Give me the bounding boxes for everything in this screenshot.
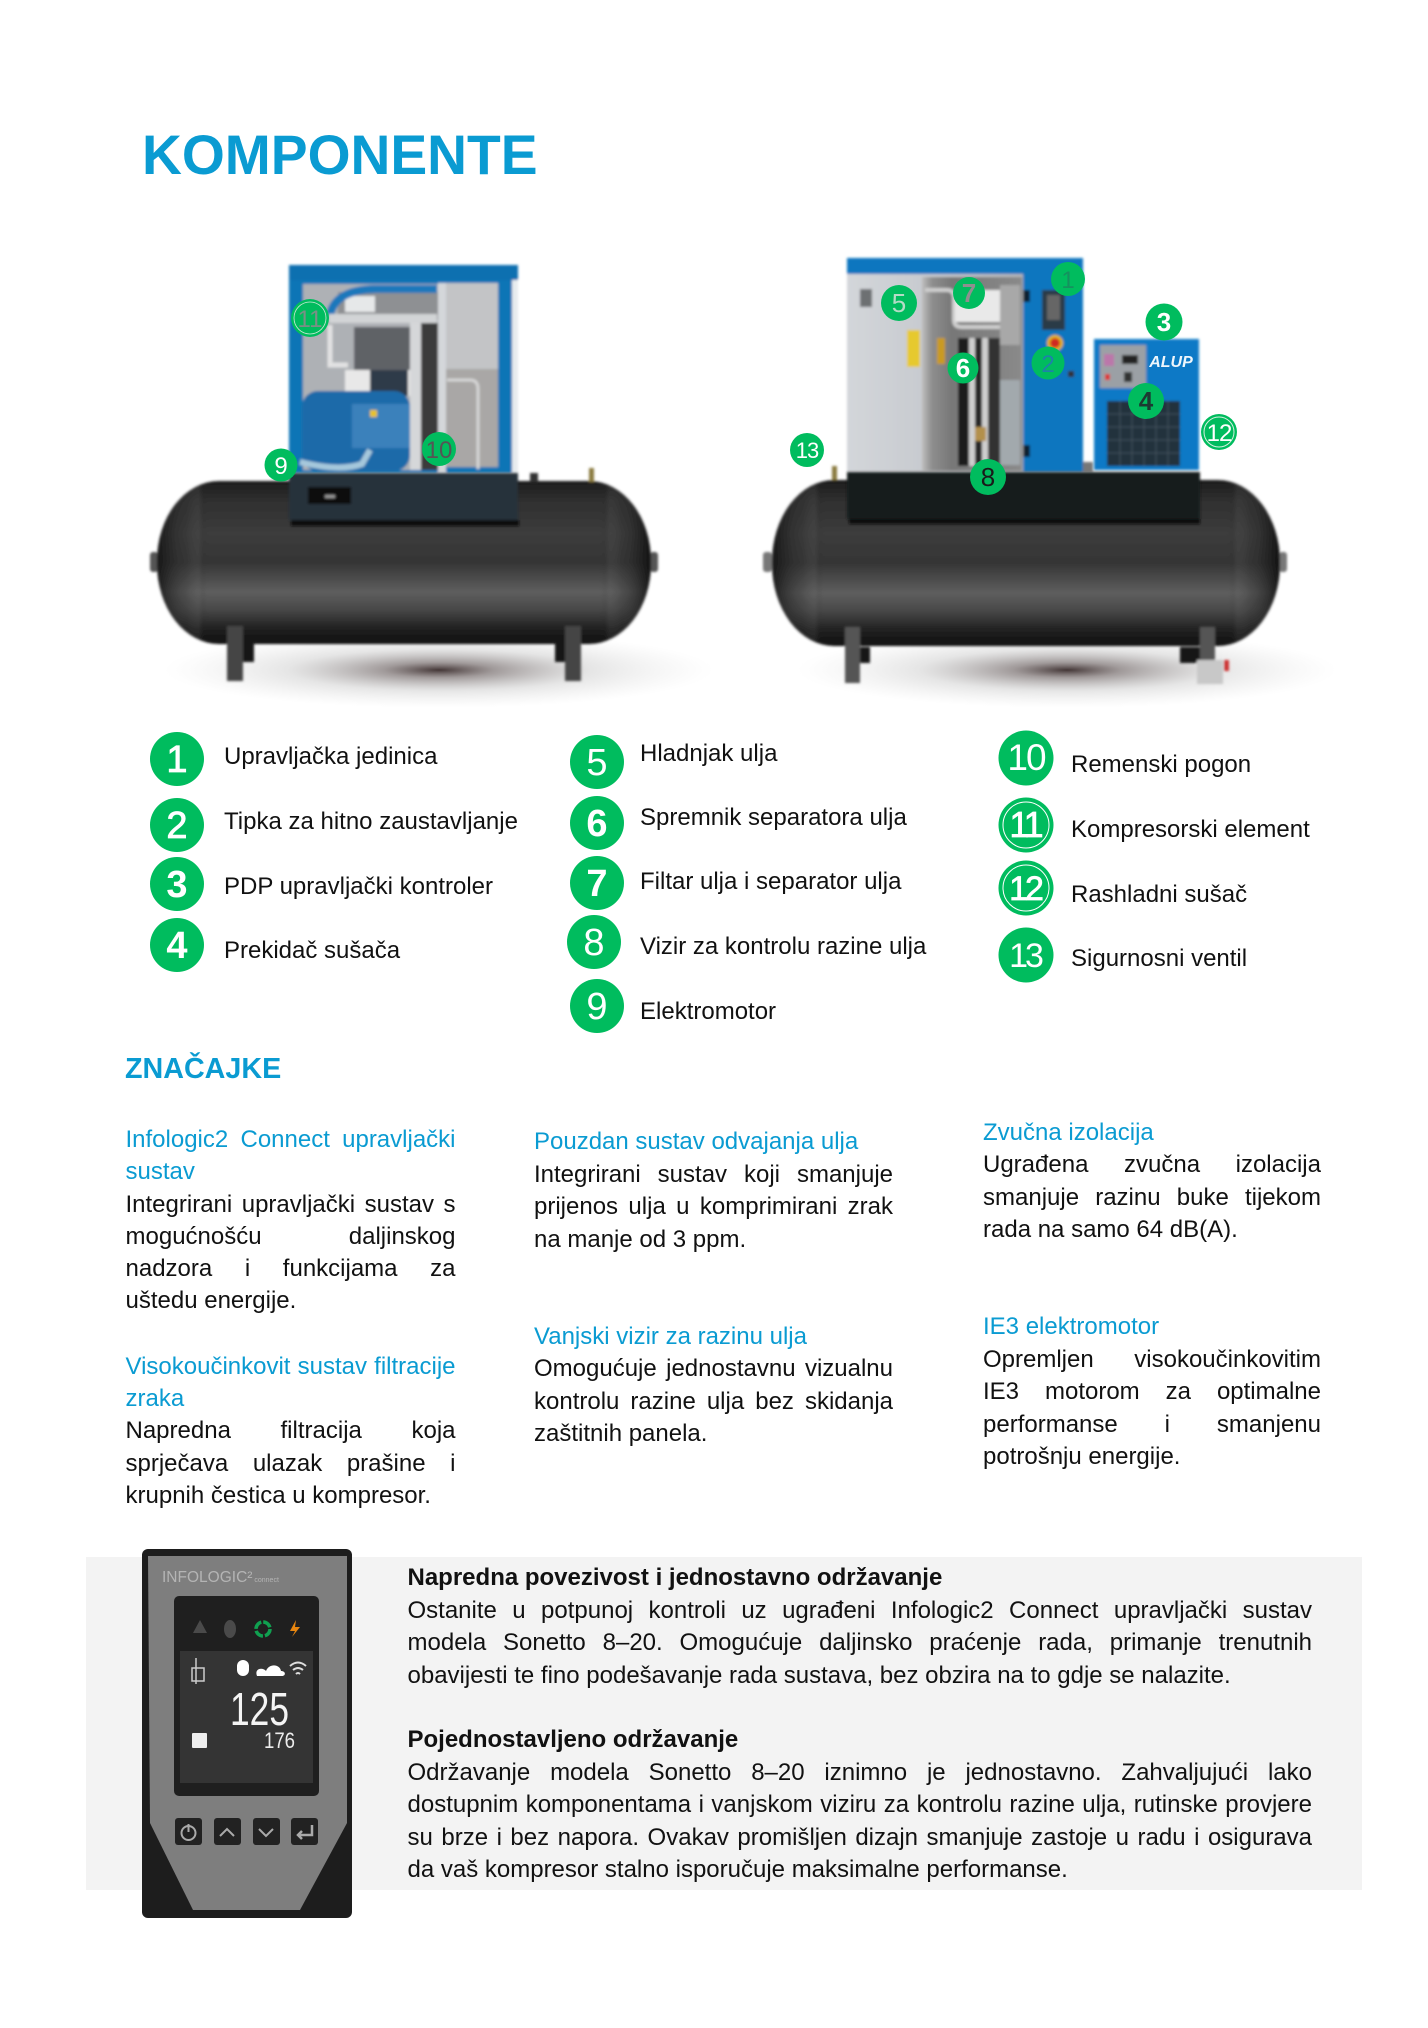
legend item 7: [570, 856, 902, 910]
icon: Infologic controller: [142, 1549, 352, 1918]
badge 11: 11: [298, 306, 322, 333]
badge 7: [953, 277, 985, 309]
text: sprječava ulazak prašine i: [126, 1450, 456, 1477]
legend item 12: Rashladni sušač: [1071, 881, 1247, 908]
floor shadow: [797, 632, 1337, 708]
badge 12: 12: [1207, 420, 1232, 447]
legend item 6: 6: [586, 803, 608, 845]
legend item 3: [150, 857, 493, 911]
cabinet base: [289, 473, 519, 526]
text block: maintenance: [408, 1726, 1312, 1883]
badge 13: 13: [796, 438, 819, 463]
badge 9: 9: [274, 453, 288, 480]
illustration: compressor left view: [148, 263, 662, 701]
text: su brze i bez napora. Ovakav promišljen dizajn smanjuje zastoje u radu i osigurava: [408, 1824, 1312, 1851]
badge 2: 2: [1041, 351, 1055, 378]
legend item 13: [998, 928, 1247, 982]
feature: oil sight glass: [534, 1323, 893, 1447]
legend item 9: [570, 979, 776, 1033]
status icons: [193, 1620, 207, 1633]
badge 5: 5: [892, 288, 906, 318]
text: Pojednostavljeno održavanje: [408, 1726, 738, 1753]
text: mogućnošću daljinskog: [126, 1223, 456, 1250]
badge 3: 3: [1157, 307, 1171, 337]
legend item 1: Upravljačka jedinica: [224, 743, 437, 770]
text: IE3 elektromotor: [983, 1313, 1159, 1340]
text: da vaš kompresor stalno isporučuje maksimalne performanse.: [408, 1856, 1068, 1883]
text: krupnih čestica u kompresor.: [126, 1482, 431, 1509]
pressure reading: 125: [230, 1683, 289, 1735]
cabinet base: [847, 472, 1200, 524]
legend item 10: 10: [1007, 737, 1046, 778]
air tank: [150, 468, 658, 681]
heading: features: ZNAČAJKE: [125, 1053, 281, 1085]
legend item 6: [570, 796, 907, 850]
text: sustav: [126, 1158, 195, 1185]
legend item 2: Tipka za hitno zaustavljanje: [224, 808, 518, 835]
legend item 7: Filtar ulja i separator ulja: [640, 868, 901, 895]
legend: components 10-13: [998, 730, 1310, 982]
floor shadow: [164, 632, 714, 708]
text: nadzora i funkcijama za: [126, 1255, 456, 1282]
badge 9: [264, 448, 298, 482]
legend item 4: Prekidač sušača: [224, 937, 400, 964]
legend item 4: [150, 918, 400, 972]
legend item 11: 11: [1009, 804, 1043, 845]
illustration: compressor right view: [761, 256, 1289, 700]
badge 13: [790, 433, 824, 467]
legend item 7: 7: [586, 863, 608, 905]
feature: IE3 motor: [983, 1313, 1321, 1470]
text: Vanjski vizir za razinu ulja: [534, 1323, 807, 1350]
legend item 8: [567, 915, 926, 969]
text: Integrirani upravljački sustav s: [126, 1191, 456, 1218]
buttons: [175, 1818, 318, 1845]
legend item 11: Kompresorski element: [1071, 816, 1310, 843]
legend item 4: 4: [166, 925, 188, 967]
text: na manje od 3 ppm.: [534, 1226, 746, 1253]
legend item 12: 12: [1009, 870, 1043, 908]
badge 1: [1051, 262, 1085, 296]
legend item 12: [998, 860, 1247, 916]
air tank: [763, 466, 1287, 684]
legend item 3: 3: [166, 864, 188, 906]
text: prijenos ulja u komprimirani zrak: [534, 1193, 893, 1220]
display: [174, 1596, 319, 1796]
text: kontrolu razine ulja bez skidanja: [534, 1388, 893, 1415]
feature: air filtration: [126, 1353, 456, 1509]
badge 6: [948, 352, 978, 384]
text: Napredna povezivost i jednostavno održavanje: [408, 1564, 942, 1591]
text: Zvučna izolacija: [983, 1119, 1154, 1146]
badge 8: [970, 459, 1006, 495]
text: Pouzdan sustav odvajanja ulja: [534, 1128, 858, 1155]
legend item 5: 5: [586, 742, 608, 784]
legend item 8: 8: [583, 922, 605, 964]
feature: Infologic2 Connect: [126, 1126, 456, 1314]
legend item 11: [998, 798, 1310, 852]
text: potrošnju energije.: [983, 1443, 1180, 1470]
legend item 2: [150, 798, 518, 852]
feature: oil separation: [534, 1128, 893, 1253]
badge 10: 10: [426, 437, 452, 464]
legend: components 5-9: [567, 735, 926, 1033]
text: performanse i smanjenu: [983, 1411, 1321, 1438]
text: smanjuje razinu buke tijekom: [983, 1184, 1321, 1211]
legend item 9: 9: [586, 986, 608, 1028]
legend item 9: Elektromotor: [640, 998, 776, 1025]
badge 4: [1128, 383, 1164, 419]
badge 11: [291, 299, 329, 337]
text: uštedu energije.: [126, 1287, 296, 1314]
badge 7: 7: [962, 278, 976, 308]
legend item 13: Sigurnosni ventil: [1071, 945, 1247, 972]
legend item 5: Hladnjak ulja: [640, 740, 777, 767]
text: Visokoučinkovit sustav filtracije: [126, 1353, 456, 1380]
legend item 2: 2: [166, 805, 188, 847]
brand label: INFOLOGIC² connect: [162, 1569, 279, 1586]
badge 1: 1: [1061, 267, 1075, 294]
text: Ostanite u potpunoj kontroli uz ugrađeni Infologic2 Connect upravljački sustav: [408, 1597, 1312, 1624]
dryer unit: [1094, 339, 1199, 470]
main cabinet: [847, 258, 1093, 472]
badge 12: [1201, 414, 1237, 450]
text: obavijesti te fino podešavanje rada sustava, bez obzira na to gdje se nalazite.: [408, 1662, 1231, 1689]
badge 4: 4: [1139, 386, 1154, 416]
legend: components 1-4: [150, 732, 518, 972]
title: KOMPONENTE: [142, 124, 538, 186]
legend item 3: PDP upravljački kontroler: [224, 873, 493, 900]
text: dostupnim komponentama i vanjskom viziru za kontrolu razine ulja, rutinske provjere: [408, 1791, 1312, 1818]
text: rada na samo 64 dB(A).: [983, 1216, 1238, 1243]
text: modela Sonetto 8–20. Omogućuje daljinsko praćenje rada, primanje trenutnih: [408, 1629, 1312, 1656]
text: Održavanje modela Sonetto 8–20 iznimno je jednostavno. Zahvaljujući lako: [408, 1759, 1312, 1786]
cabinet interior: [289, 265, 518, 473]
text: Infologic2 Connect upravljački: [126, 1126, 456, 1153]
badge 3: [1146, 304, 1182, 340]
legend item 13: 13: [1009, 937, 1043, 975]
legend item 10: Remenski pogon: [1071, 751, 1251, 778]
badge 2: [1032, 346, 1064, 380]
text block: connectivity: [408, 1564, 1312, 1689]
legend item 10: [998, 730, 1251, 786]
temperature reading: 176: [264, 1728, 295, 1753]
legend item 6: Spremnik separatora ulja: [640, 804, 907, 831]
text: Opremljen visokoučinkovitim: [983, 1346, 1321, 1373]
text: Omogućuje jednostavnu vizualnu: [534, 1355, 893, 1382]
text: Integrirani sustav koji smanjuje: [534, 1161, 893, 1188]
panel: connectivity background: [86, 1557, 1362, 1890]
feature: sound insulation: [983, 1119, 1321, 1243]
legend item 5: [570, 735, 778, 789]
text: IE3 motorom za optimalne: [983, 1378, 1321, 1405]
text: Napredna filtracija koja: [126, 1417, 456, 1444]
legend item 1: [150, 732, 438, 786]
text: Ugrađena zvučna izolacija: [983, 1151, 1321, 1178]
legend item 1: 1: [166, 739, 188, 781]
legend item 8: Vizir za kontrolu razine ulja: [640, 933, 926, 960]
dryer logo: ALUP: [1148, 354, 1193, 371]
badge 10: [422, 432, 456, 466]
text: zraka: [126, 1385, 184, 1412]
badge 6: 6: [956, 353, 970, 383]
badge 5: [881, 285, 917, 321]
text: zaštitnih panela.: [534, 1420, 707, 1447]
badge 8: 8: [981, 462, 995, 492]
